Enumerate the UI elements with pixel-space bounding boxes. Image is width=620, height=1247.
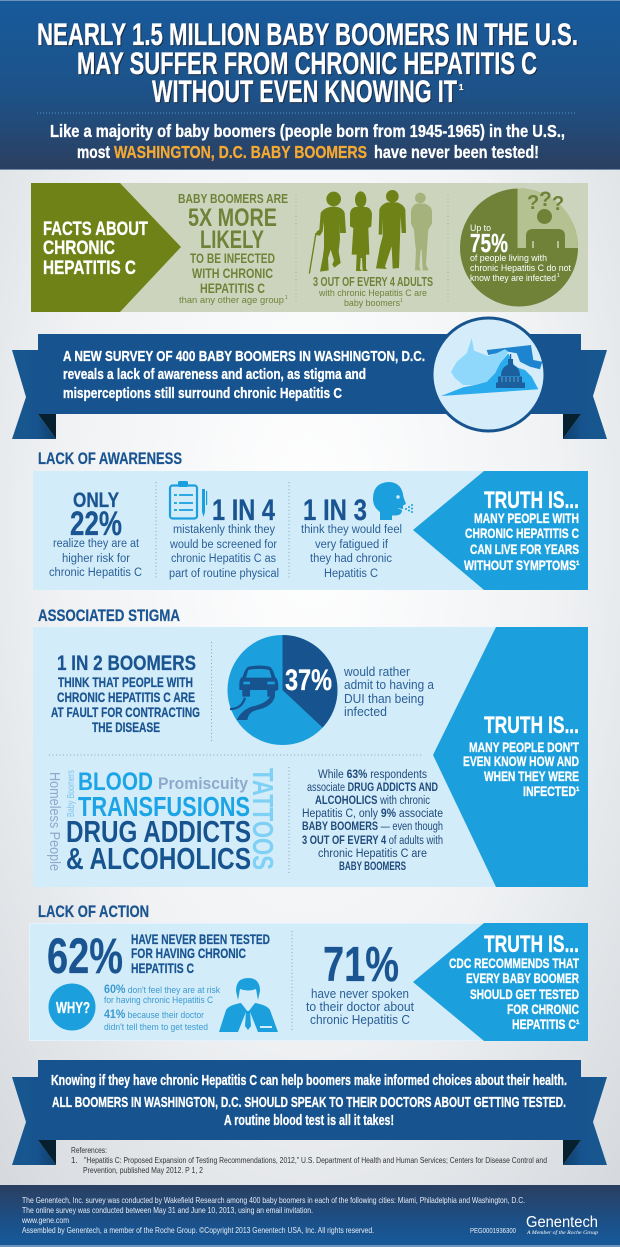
callout: truth is, infected: WHEN THEY WERE: [484, 768, 579, 784]
stat: 62 percent never tested: [47, 928, 270, 984]
fact: 5x more likely: HEPATITIS C: [200, 280, 265, 296]
text: association comparison: While 63% respondents: [318, 769, 427, 781]
stat: 1 in 4: chronic Hepatitis C as: [171, 553, 276, 565]
text: DUI comparison: [343, 664, 435, 719]
fact: 5x more likely: than any other age group: [179, 295, 284, 305]
text: DUI comparison: DUI than being: [344, 691, 424, 706]
icon: why circle: WHY?: [56, 1000, 90, 1017]
word cloud: DRUG ADDICTS: [66, 814, 251, 849]
panel: associated stigma: [33, 627, 588, 887]
text: reasons: didn't tell them to get tested: [104, 1022, 208, 1033]
stat: 1 in 4: would be screened for: [169, 539, 277, 551]
word cloud: [46, 768, 278, 876]
text: reasons: 60% don't feel they are at risk: [104, 982, 220, 996]
icon: clipboard: [170, 481, 207, 518]
text: DUI comparison: infected: [344, 704, 387, 719]
callout: truth is, symptoms: CHRONIC HEPATITIS C: [465, 525, 579, 541]
stat: 71 percent: have never spoken: [311, 986, 409, 1001]
icon: person with question marks: ?: [552, 193, 564, 215]
stat: 1 in 3: very fatigued if: [315, 539, 389, 551]
callout: truth is, symptoms: TRUTH IS...: [484, 487, 579, 514]
text: association comparison: [302, 769, 443, 873]
subtitle: have never been tested!: [374, 142, 539, 162]
stat: 62 percent never tested: 62%: [47, 928, 123, 984]
callout: truth is, infected: MANY PEOPLE DON'T: [469, 739, 579, 755]
survey text: A NEW SURVEY OF 400 BABY BOOMERS IN WASHINGTON, D.C.: [63, 349, 425, 365]
panel: lack of awareness: [33, 471, 588, 590]
title: WITHOUT EVEN KNOWING IT: [152, 73, 457, 109]
stat: 1 in 2 boomers: 1 IN 2 BOOMERS: [57, 652, 196, 675]
text: association comparison: Hepatitis C, only 9% associate: [302, 808, 443, 820]
callout: truth is, CDC recommends: [413, 923, 588, 1041]
callout: truth is, symptoms: [413, 471, 588, 590]
text: reasons: 41% because their doctor: [104, 1007, 204, 1021]
logo: Genentech: Genentech: [526, 1214, 598, 1231]
callout: truth is, infected: EVEN KNOW HOW AND: [463, 753, 579, 769]
text: association comparison: 3 OUT OF EVERY 4 of adults with: [302, 835, 443, 847]
fact: 3 out of 4 adults: [313, 274, 433, 308]
ribbon: new survey banner: [12, 316, 607, 439]
word cloud: & ALCOHOLICS: [66, 841, 251, 876]
word cloud: BLOOD: [78, 768, 153, 796]
icon: car on road: [230, 665, 278, 720]
survey text: [63, 349, 425, 402]
text: association comparison: BABY BOOMERS: [339, 861, 406, 873]
stat: 1 in 2 boomers: CHRONIC HEPATITIS C ARE: [57, 690, 195, 705]
fact: 5x more likely: BABY BOOMERS ARE: [178, 191, 288, 206]
text: reasons: for having chronic Hepatitis C: [104, 995, 213, 1006]
fact: 5x more likely: WITH CHRONIC: [192, 265, 273, 281]
fact: 5x more likely: [178, 191, 288, 305]
chart: 75 percent circle: chronic Hepatitis C do not: [470, 263, 571, 273]
icon: map of DC region and capitol: [430, 316, 546, 432]
survey text: reveals a lack of awareness and action, as stigma and: [63, 367, 366, 383]
footer: [0, 1185, 620, 1247]
text: association comparison: chronic Hepatitis C are: [318, 848, 427, 860]
stat: 71 percent: 71%: [323, 938, 399, 992]
icon: doctor: [219, 978, 278, 1032]
chart: 75 percent circle: [460, 188, 578, 306]
chart: 37 percent pie: 37%: [285, 664, 332, 697]
facts arrow heading: CHRONIC: [43, 238, 115, 259]
title: 1: [459, 83, 464, 92]
callout: truth is, CDC recommends: EVERY BABY BOOMER: [466, 970, 579, 986]
word cloud: Baby Boomers: [66, 770, 77, 817]
stat: only 22 percent: [49, 489, 142, 579]
icon: person with question marks: ?: [527, 192, 539, 214]
fact: 3 out of 4 adults: 3 OUT OF EVERY 4 ADULTS: [313, 274, 433, 289]
fact: 3 out of 4 adults: with chronic Hepatitis C are: [318, 288, 427, 298]
callout: truth is, CDC recommends: HEPATITIS C: [512, 1016, 576, 1032]
stat: 1 in 3: [301, 494, 402, 580]
word cloud: TATTOOS: [246, 768, 278, 870]
text: DUI comparison: would rather: [343, 664, 411, 679]
callout: truth is, infected: [433, 627, 588, 887]
icon: why circle: [48, 984, 96, 1030]
callout: truth is, CDC recommends: SHOULD GET TESTED: [470, 986, 579, 1002]
chart: 75 percent circle: Up to: [470, 223, 491, 233]
references: 1.: [71, 1156, 78, 1165]
stat: only 22 percent: realize they are at: [53, 538, 140, 550]
stat: 1 in 4: [169, 494, 279, 580]
text: association comparison: ALCOHOLICS with chronic: [315, 795, 430, 807]
panel: facts about chronic hepatitis C: [31, 183, 588, 312]
fact: 3 out of 4 adults: 1: [400, 298, 403, 304]
stat: only 22 percent: chronic Hepatitis C: [49, 567, 142, 579]
stat: 62 percent never tested: HAVE NEVER BEEN TESTED: [131, 931, 270, 947]
stat: only 22 percent: ONLY: [73, 489, 119, 512]
callout: truth is, CDC recommends: TRUTH IS...: [484, 931, 579, 958]
text: association comparison: associate DRUG ADDICTS AND: [307, 782, 438, 794]
stat: 1 in 3: they had chronic: [310, 553, 392, 565]
footer text: PEG0001936300: [470, 1228, 516, 1235]
facts arrow heading: [31, 183, 181, 312]
stat: 1 in 3: 1 IN 3: [303, 494, 367, 527]
stat: 71 percent: [306, 938, 414, 1027]
subtitle: [50, 121, 565, 162]
survey text: misperceptions still surround chronic Hepatitis C: [63, 386, 342, 402]
icon: four adults silhouettes: [309, 190, 432, 274]
stat: 1 in 4: mistakenly think they: [173, 524, 275, 536]
stat: 1 in 2 boomers: [51, 652, 200, 735]
chart: 37 percent pie: [228, 635, 338, 745]
stat: only 22 percent: higher risk for: [62, 553, 130, 565]
stat: only 22 percent: 22%: [70, 505, 122, 543]
callout: truth is, infected: INFECTED: [523, 783, 576, 799]
callout: truth is, symptoms: 1: [576, 561, 580, 567]
stat: 1 in 4: part of routine physical: [169, 568, 279, 580]
word cloud: Promiscuity: [158, 774, 249, 793]
ribbon: call to action: A routine blood test is all it takes!: [224, 1112, 394, 1129]
fact: 5x more likely: TO BE INFECTED: [190, 250, 275, 266]
chart: 75 percent circle: know they are infected: [470, 273, 556, 283]
fact: 5x more likely: 5X MORE: [188, 204, 277, 232]
footer text: [21, 1195, 525, 1235]
references: "Hepatitis C: Proposed Expansion of Testing Recommendations, 2012," U.S. Department of Health and Human Services; Centers for Disease Control and: [84, 1156, 547, 1165]
references: [71, 1146, 547, 1175]
title: [37, 16, 578, 109]
icon: head breathing: [373, 482, 413, 520]
heading: lack of action: LACK OF ACTION: [38, 902, 149, 921]
icon: person with question marks: [526, 188, 565, 248]
word cloud: Homeless People: [46, 772, 63, 871]
subtitle: WASHINGTON, D.C. BABY BOOMERS: [114, 142, 367, 162]
callout: truth is, infected: 1: [576, 787, 580, 793]
header banner: [0, 0, 620, 170]
stat: 1 in 2 boomers: AT FAULT FOR CONTRACTING: [51, 705, 200, 720]
facts arrow heading: FACTS ABOUT: [43, 219, 148, 240]
fact: 5x more likely: 1: [285, 295, 288, 301]
chart: 75 percent circle: of people living with: [470, 253, 547, 263]
fact: 5x more likely: LIKELY: [200, 226, 264, 254]
footer text: The online survey was conducted between May 31 and June 10, 2013, using an email invitation.: [22, 1205, 313, 1215]
callout: truth is, CDC recommends: FOR CHRONIC: [507, 1001, 579, 1017]
logo: Genentech: A Member of the Roche Group: [526, 1229, 598, 1236]
stat: 1 in 3: Hepatitis C: [324, 568, 378, 580]
stat: 71 percent: chronic Hepatitis C: [310, 1012, 410, 1027]
fact: 3 out of 4 adults: baby boomers: [344, 298, 400, 308]
stat: 62 percent never tested: HEPATITIS C: [131, 960, 194, 976]
chart: 75 percent circle: 1: [557, 273, 560, 279]
callout: truth is, CDC recommends: 1: [576, 1020, 580, 1026]
word cloud: TRANSFUSIONS: [78, 791, 250, 822]
stat: 1 in 2 boomers: THE DISEASE: [92, 720, 160, 735]
stat: 1 in 3: think they would feel: [301, 524, 402, 536]
stat: 62 percent never tested: FOR HAVING CHRONIC: [131, 945, 246, 961]
icon: person with question marks: ?: [539, 188, 552, 211]
facts arrow heading: HEPATITIS C: [43, 258, 136, 279]
references: References:: [71, 1146, 107, 1155]
stat: 71 percent: to their doctor about: [306, 999, 414, 1014]
text: DUI comparison: admit to having a: [344, 677, 435, 692]
subtitle: most: [77, 142, 110, 162]
callout: truth is, symptoms: WITHOUT SYMPTOMS: [464, 557, 576, 573]
stat: 1 in 2 boomers: THINK THAT PEOPLE WITH: [58, 675, 193, 690]
footer text: Assembled by Genentech, a member of the Roche Group. ©Copyright 2013 Genentech USA, Inc. All rights reserved.: [22, 1225, 374, 1235]
text: association comparison: BABY BOOMERS — even though: [302, 821, 443, 833]
heading: lack of awareness: LACK OF AWARENESS: [38, 449, 182, 468]
panel: lack of action: [30, 923, 588, 1041]
footer text: www.gene.com: [21, 1215, 69, 1225]
heading: associated stigma: ASSOCIATED STIGMA: [38, 606, 180, 625]
chart: 75 percent circle: 75%: [470, 228, 508, 258]
text: reasons: [104, 982, 220, 1033]
stat: 1 in 4: 1 IN 4: [212, 494, 275, 527]
callout: truth is, symptoms: CAN LIVE FOR YEARS: [470, 541, 579, 557]
ribbon: call to action: [12, 1060, 607, 1165]
references: Prevention, published May 2012. P 1, 2: [83, 1166, 203, 1175]
callout: truth is, infected: TRUTH IS...: [484, 712, 579, 739]
callout: truth is, symptoms: MANY PEOPLE WITH: [474, 510, 579, 526]
